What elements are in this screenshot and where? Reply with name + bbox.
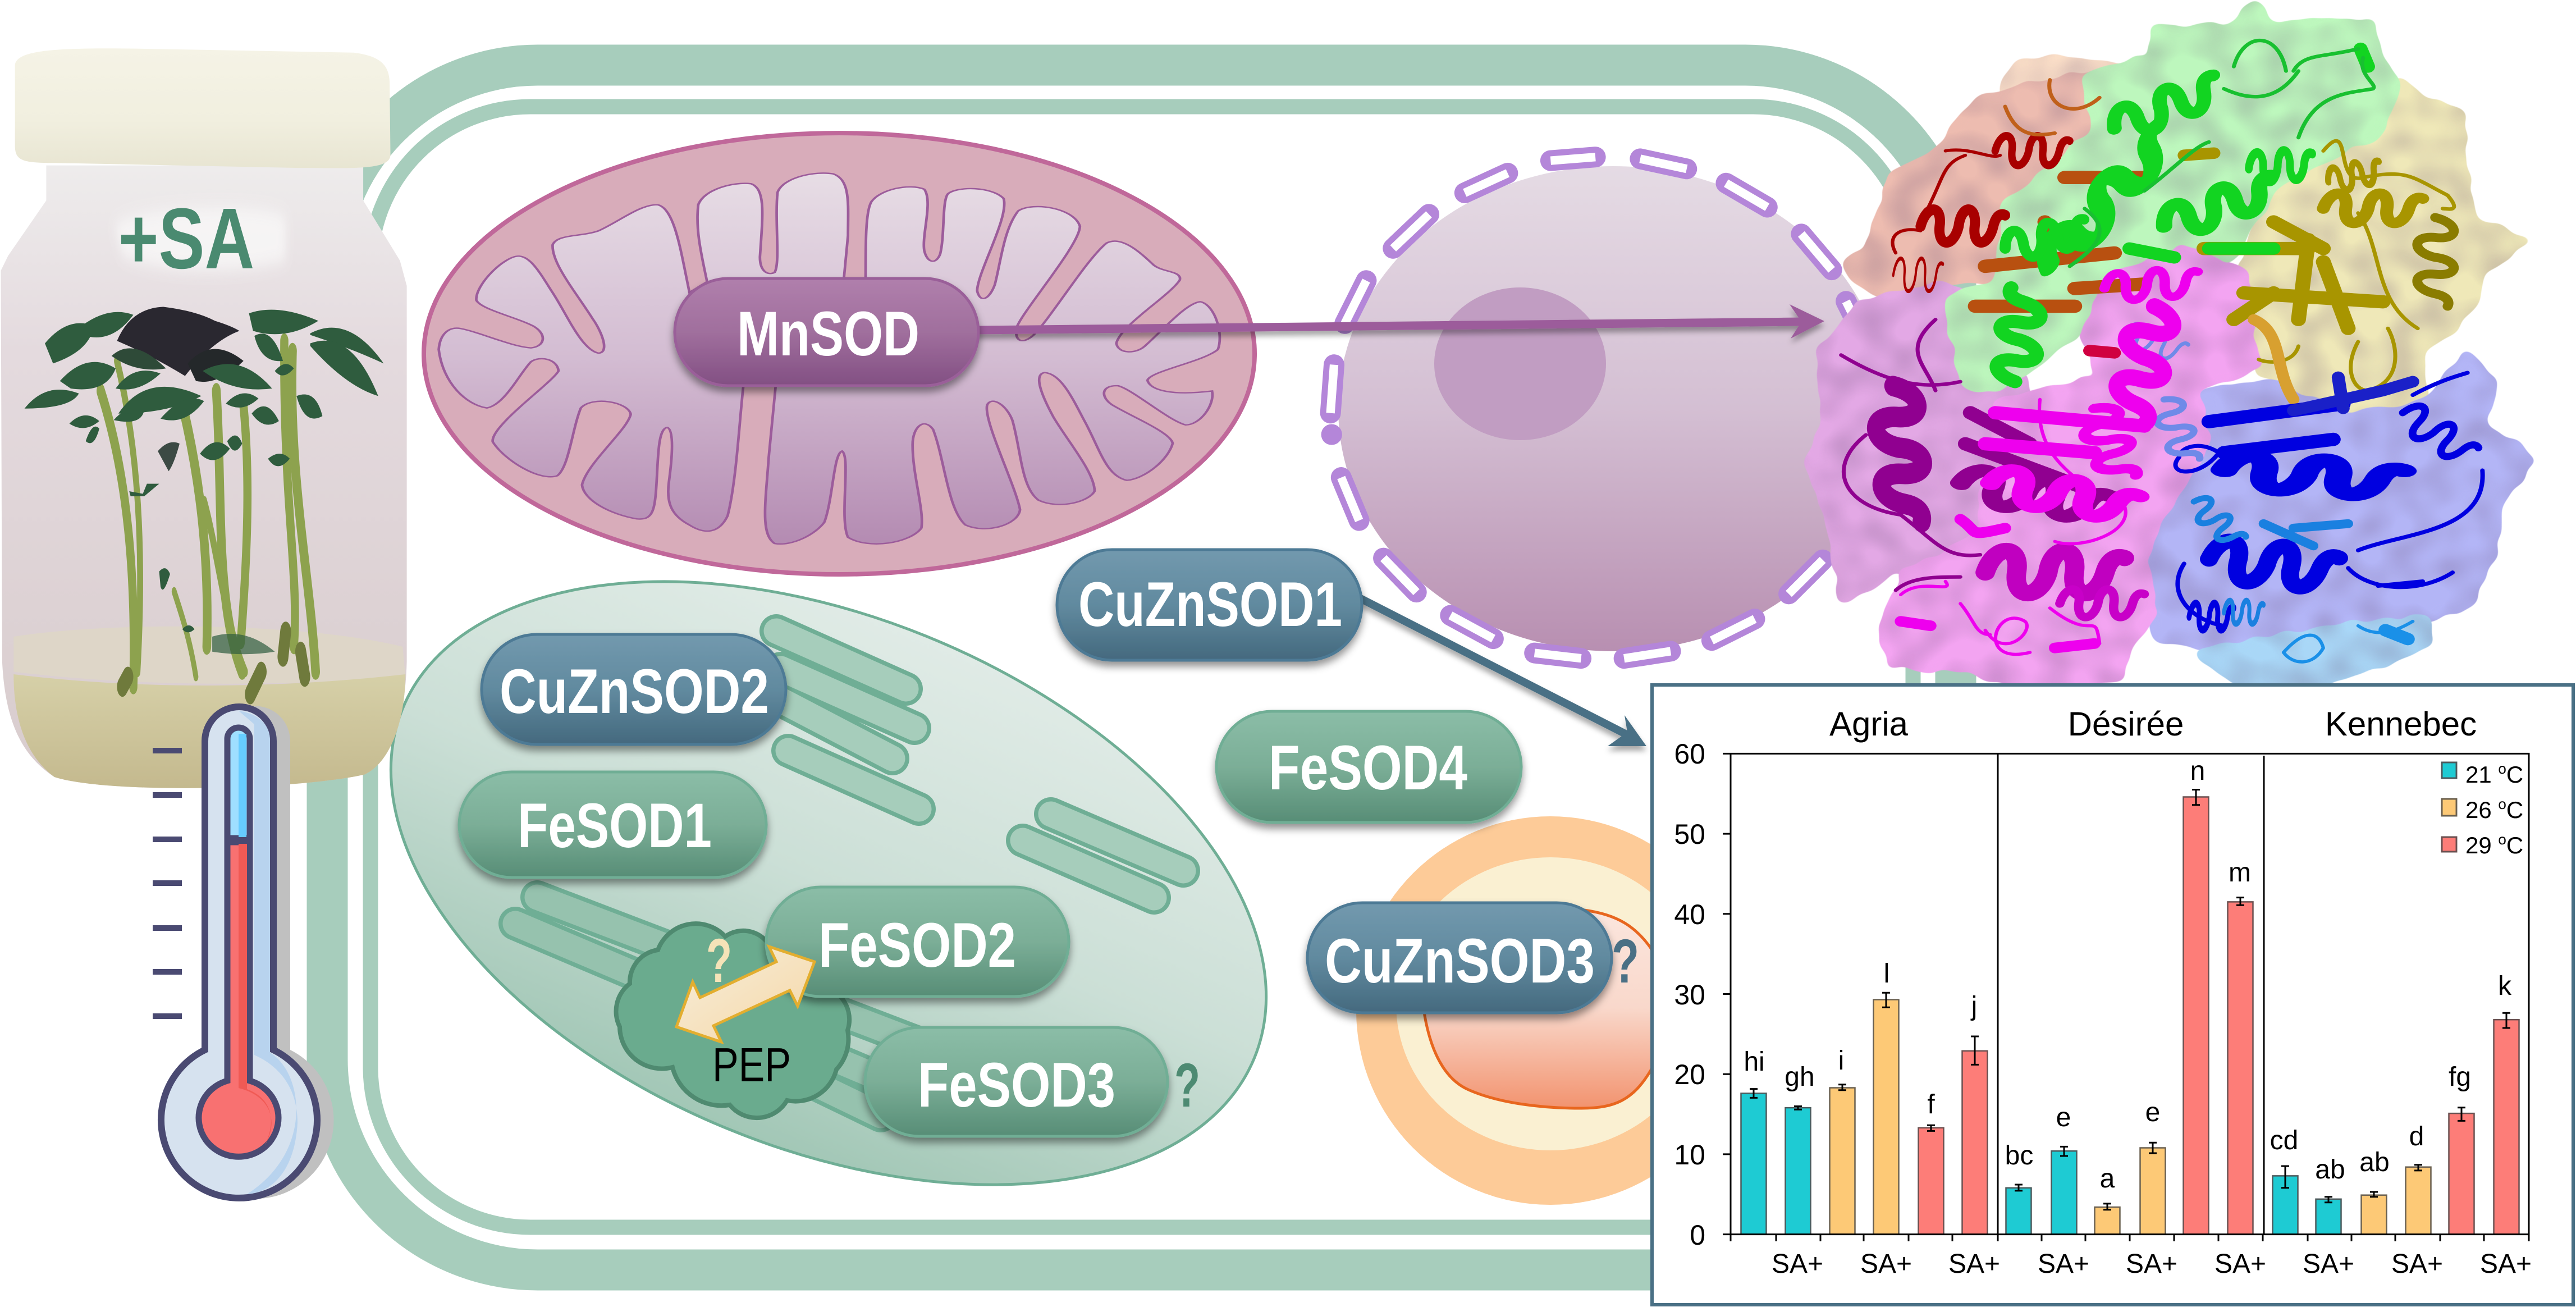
pill: FeSOD4: FeSOD4 <box>1269 733 1467 803</box>
y axis numbers: 10 <box>1674 1139 1705 1171</box>
sky blue surface <box>2194 615 2433 694</box>
plastid-encoded polymerase cloud: PEP <box>616 924 849 1118</box>
question mark: FeSOD3: ? <box>1174 1051 1200 1120</box>
pill: FeSOD3 <box>865 1027 1168 1136</box>
red subunit surface <box>1838 69 2154 306</box>
legend: o <box>2498 831 2506 848</box>
red mercury column <box>199 842 278 1157</box>
pill: FeSOD4 <box>1216 711 1521 822</box>
x axis SA+ labels: SA+ <box>2303 1249 2354 1279</box>
y axis numbers: 40 <box>1674 899 1705 930</box>
blue subunit surface <box>2142 349 2540 652</box>
pill: CuZnSOD1 <box>1057 550 1362 660</box>
label PEP: PEP <box>712 1039 791 1092</box>
pill: FeSOD1: FeSOD1 <box>518 790 712 861</box>
cultivar headings <box>1829 705 2477 743</box>
middle layer <box>1396 857 1705 1150</box>
bars: 29 °C <box>1919 797 2519 1235</box>
significance letters: n <box>2190 756 2205 786</box>
cream question mark: ? <box>706 926 732 995</box>
question mark: CuZnSOD3: ? <box>1612 927 1639 996</box>
peroxisome / outer organelle <box>1356 816 1745 1205</box>
green ribbons <box>1996 40 2374 383</box>
thermometer shadow <box>176 706 333 1199</box>
bars: 21 °C <box>1741 1093 2341 1235</box>
error bars <box>1750 789 2510 1210</box>
legend: 21 <box>2465 761 2492 788</box>
plasma membrane: inner band <box>370 107 1913 1227</box>
violet surface <box>1804 282 2144 606</box>
bars: 26 °C <box>1830 999 2431 1235</box>
olive subunit surface <box>2224 77 2532 413</box>
x axis SA+ labels: SA+ <box>2038 1249 2089 1279</box>
nucleolus <box>1434 287 1606 440</box>
pill: CuZnSOD1: CuZnSOD1 <box>1078 569 1342 639</box>
magenta surface <box>1878 242 2261 694</box>
protein structure: SOD tetramer <box>1804 0 2540 694</box>
arrow: MnSOD to protein structure <box>974 304 1824 339</box>
pill: CuZnSOD2: CuZnSOD2 <box>500 656 769 726</box>
culture jar with plantlets <box>1 48 407 788</box>
x axis SA+ labels: SA+ <box>2480 1249 2532 1279</box>
magenta ribbons <box>1901 267 2200 654</box>
legend: C <box>2506 761 2523 788</box>
thermometer glass <box>161 707 317 1198</box>
significance letters: l <box>1884 959 1889 989</box>
significance letters: cd <box>2270 1126 2298 1155</box>
legend: 26 <box>2465 797 2492 823</box>
legend: C <box>2506 797 2523 823</box>
glass shade <box>239 711 298 1194</box>
x axis SA+ labels: SA+ <box>2391 1249 2443 1279</box>
significance letters: f <box>1927 1090 1935 1119</box>
double arrow: PEP and FeSOD2 <box>676 947 815 1042</box>
significance letters: a <box>2100 1164 2115 1194</box>
y axis numbers: 50 <box>1674 819 1705 850</box>
x axis SA+ labels: SA+ <box>1860 1249 1912 1279</box>
cultivar headings: Kennebec <box>2325 705 2477 743</box>
peach subunit surface <box>1995 53 2194 222</box>
significance letters: d <box>2409 1122 2424 1151</box>
pill: FeSOD2 <box>766 887 1069 997</box>
chloroplast <box>302 463 1355 1304</box>
cultivar headings: Désirée <box>2068 705 2184 743</box>
legend: C <box>2506 832 2523 858</box>
legend: o <box>2498 796 2506 812</box>
x axis SA+ labels: SA+ <box>1772 1249 1823 1279</box>
axes and separators <box>1723 753 2529 1241</box>
legend: 29 <box>2465 832 2492 858</box>
pill: FeSOD1 <box>459 772 766 878</box>
nucleus <box>1330 157 1888 659</box>
glass highlight <box>115 207 286 271</box>
x axis SA+ labels: SA+ <box>2214 1249 2266 1279</box>
y axis numbers: 30 <box>1674 979 1705 1011</box>
x axis SA+ labels <box>1772 1249 2532 1279</box>
x axis SA+ labels: SA+ <box>1948 1249 2000 1279</box>
pill: CuZnSOD3 <box>1307 903 1612 1013</box>
legend <box>2442 760 2523 858</box>
significance letters: gh <box>1785 1062 1815 1092</box>
significance letters: e <box>2145 1098 2160 1127</box>
legend: o <box>2498 760 2506 777</box>
significance letters: i <box>1838 1046 1844 1076</box>
plantlet leaves <box>25 307 383 654</box>
arrow: CuZnSOD1 to chart <box>1352 594 1646 746</box>
pill: MnSOD: MnSOD <box>737 299 919 369</box>
mitochondrion <box>424 133 1255 574</box>
jar glass body <box>1 166 407 788</box>
significance letters: k <box>2498 971 2512 1001</box>
x axis SA+ labels: SA+ <box>2126 1249 2177 1279</box>
significance letters: ab <box>2315 1155 2345 1185</box>
pill: CuZnSOD2 <box>482 634 786 744</box>
chart panel <box>1652 685 2573 1305</box>
pill: FeSOD2: FeSOD2 <box>818 910 1016 980</box>
green surface <box>1943 0 2400 393</box>
y axis numbers: 20 <box>1674 1059 1705 1090</box>
inner matrix <box>1424 907 1661 1108</box>
cultivar headings: Agria <box>1829 705 1909 743</box>
thylakoid stacks <box>515 631 1183 1116</box>
scale ticks <box>153 751 182 1016</box>
y axis numbers: 0 <box>1690 1219 1705 1251</box>
significance letters: ab <box>2359 1148 2390 1177</box>
blue column <box>227 728 250 838</box>
significance letters: bc <box>2005 1141 2033 1171</box>
+SA label: +SA <box>118 191 254 287</box>
significance letters: hi <box>1744 1047 1765 1077</box>
significance letters: e <box>2056 1103 2071 1132</box>
thermometer <box>153 706 333 1199</box>
mitochondrial cristae <box>439 173 1220 544</box>
pill: MnSOD <box>675 278 978 386</box>
purple ribbons <box>1841 319 2111 590</box>
olive ribbons <box>2184 141 2454 399</box>
significance letters <box>1744 756 2512 1194</box>
cell wall: outer band <box>327 65 1956 1270</box>
significance letters: fg <box>2449 1062 2471 1092</box>
jar lid <box>15 48 391 168</box>
pill: CuZnSOD3: CuZnSOD3 <box>1325 926 1595 996</box>
y axis numbers: 60 <box>1674 738 1705 770</box>
significance letters: j <box>1970 991 1977 1021</box>
culture medium <box>13 627 405 788</box>
pill: FeSOD3: FeSOD3 <box>918 1050 1115 1120</box>
y axis numbers <box>1674 738 1705 1251</box>
blue ribbons <box>2120 321 2483 662</box>
nuclear envelope dashes <box>1330 157 1861 659</box>
significance letters: m <box>2229 858 2251 888</box>
red and orange ribbons <box>1893 80 2144 306</box>
plantlet stems <box>100 341 315 694</box>
